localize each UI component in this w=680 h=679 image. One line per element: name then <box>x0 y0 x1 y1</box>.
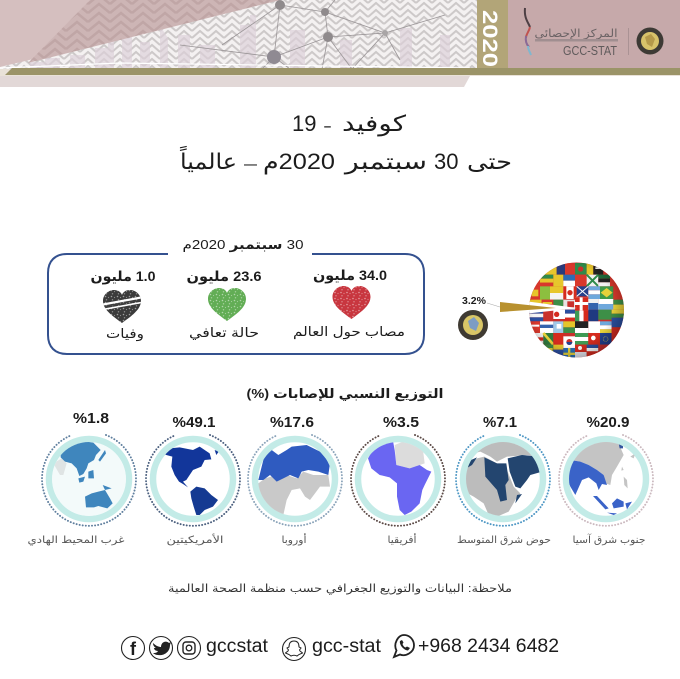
icon: instagram <box>178 636 200 660</box>
phone number: +968 2434 6482 <box>418 636 559 657</box>
percentage: %7.1 <box>483 414 517 431</box>
title line two: عالمياً <box>180 145 237 174</box>
panel: Eastern Mediterranean <box>456 414 551 546</box>
title line two: – <box>244 156 257 173</box>
GCC emblem <box>636 28 664 54</box>
title line two: 2020م <box>263 149 335 174</box>
region label: جنوب شرق آسيا <box>572 533 646 546</box>
percentage: %1.8 <box>73 410 109 427</box>
footer: social contacts <box>122 635 559 660</box>
map: Americas <box>146 435 240 526</box>
map: West Pacific <box>42 435 136 526</box>
handle: gccstat: gccstat <box>206 636 269 657</box>
date heading: 30 سبتمبر 2020م <box>183 237 304 252</box>
icon: snapchat <box>282 638 306 660</box>
year label: 2020 <box>478 10 501 67</box>
globe with flags <box>529 262 624 358</box>
percentage: %49.1 <box>172 414 216 431</box>
percentage: %20.9 <box>586 414 630 431</box>
region label: غرب المحيط الهادي <box>28 535 124 546</box>
icon: facebook: f <box>130 639 137 659</box>
icon: red heart <box>332 286 370 319</box>
map: South-East Asia <box>559 435 653 526</box>
region label: الأمريكيتين <box>166 533 224 546</box>
title line two: 30 <box>434 149 458 174</box>
recoveries figure: 23.6 مليون <box>186 268 262 285</box>
map: Africa <box>351 435 445 526</box>
GCC emblem small <box>458 303 500 340</box>
icon: facebook <box>122 636 144 660</box>
icon: twitter <box>150 636 172 660</box>
panel: Americas <box>146 414 240 546</box>
panel: South-East Asia <box>559 414 653 546</box>
world cases figure: 34.0 مليون <box>313 267 387 284</box>
GCC share wedge <box>500 302 556 312</box>
world cases label: مصاب حول العالم <box>293 324 405 340</box>
GCC-STAT logo <box>525 8 629 58</box>
icon: black heart <box>103 290 141 323</box>
region label: أفريقيا <box>388 533 417 546</box>
title line two: سبتمبر <box>344 149 427 174</box>
GCC-STAT logo: GCC-STAT <box>563 44 617 58</box>
panel: global totals <box>48 237 424 354</box>
icon: whatsapp <box>394 635 414 657</box>
map: Europe <box>248 435 342 526</box>
header banner <box>0 0 680 87</box>
icon: green heart <box>208 288 246 321</box>
title line two: حتى <box>467 149 512 174</box>
panel: Europe <box>248 414 342 546</box>
deaths figure: 1.0 مليون <box>90 268 156 285</box>
title line one <box>292 111 407 136</box>
section heading: التوزيع النسبي للإصابات (%) <box>246 386 444 401</box>
GCC-STAT logo: المركز الإحصائي <box>534 28 618 40</box>
GCC share value: 3.2% <box>462 296 486 307</box>
title line one: - <box>323 118 332 135</box>
percentage: %17.6 <box>270 414 314 431</box>
region label: أوروبا <box>282 533 307 546</box>
title line two <box>180 145 512 174</box>
note: ملاحظة: البيانات والتوزيع الجغرافي حسب منظمة الصحة العالمية <box>168 583 512 595</box>
map: Eastern Mediterranean <box>456 435 550 526</box>
panel: Africa <box>351 414 445 546</box>
title line one: 19 <box>292 111 316 136</box>
title line one: كوفيد <box>342 111 407 136</box>
recoveries label: حالة تعافي <box>189 325 259 340</box>
handle: gcc-stat: gcc-stat <box>312 636 382 657</box>
deaths label: وفيات <box>106 326 144 342</box>
region label: حوض شرق المتوسط <box>457 535 551 546</box>
panel: West Pacific <box>28 410 136 546</box>
title <box>180 111 512 174</box>
percentage: %3.5 <box>383 414 419 431</box>
